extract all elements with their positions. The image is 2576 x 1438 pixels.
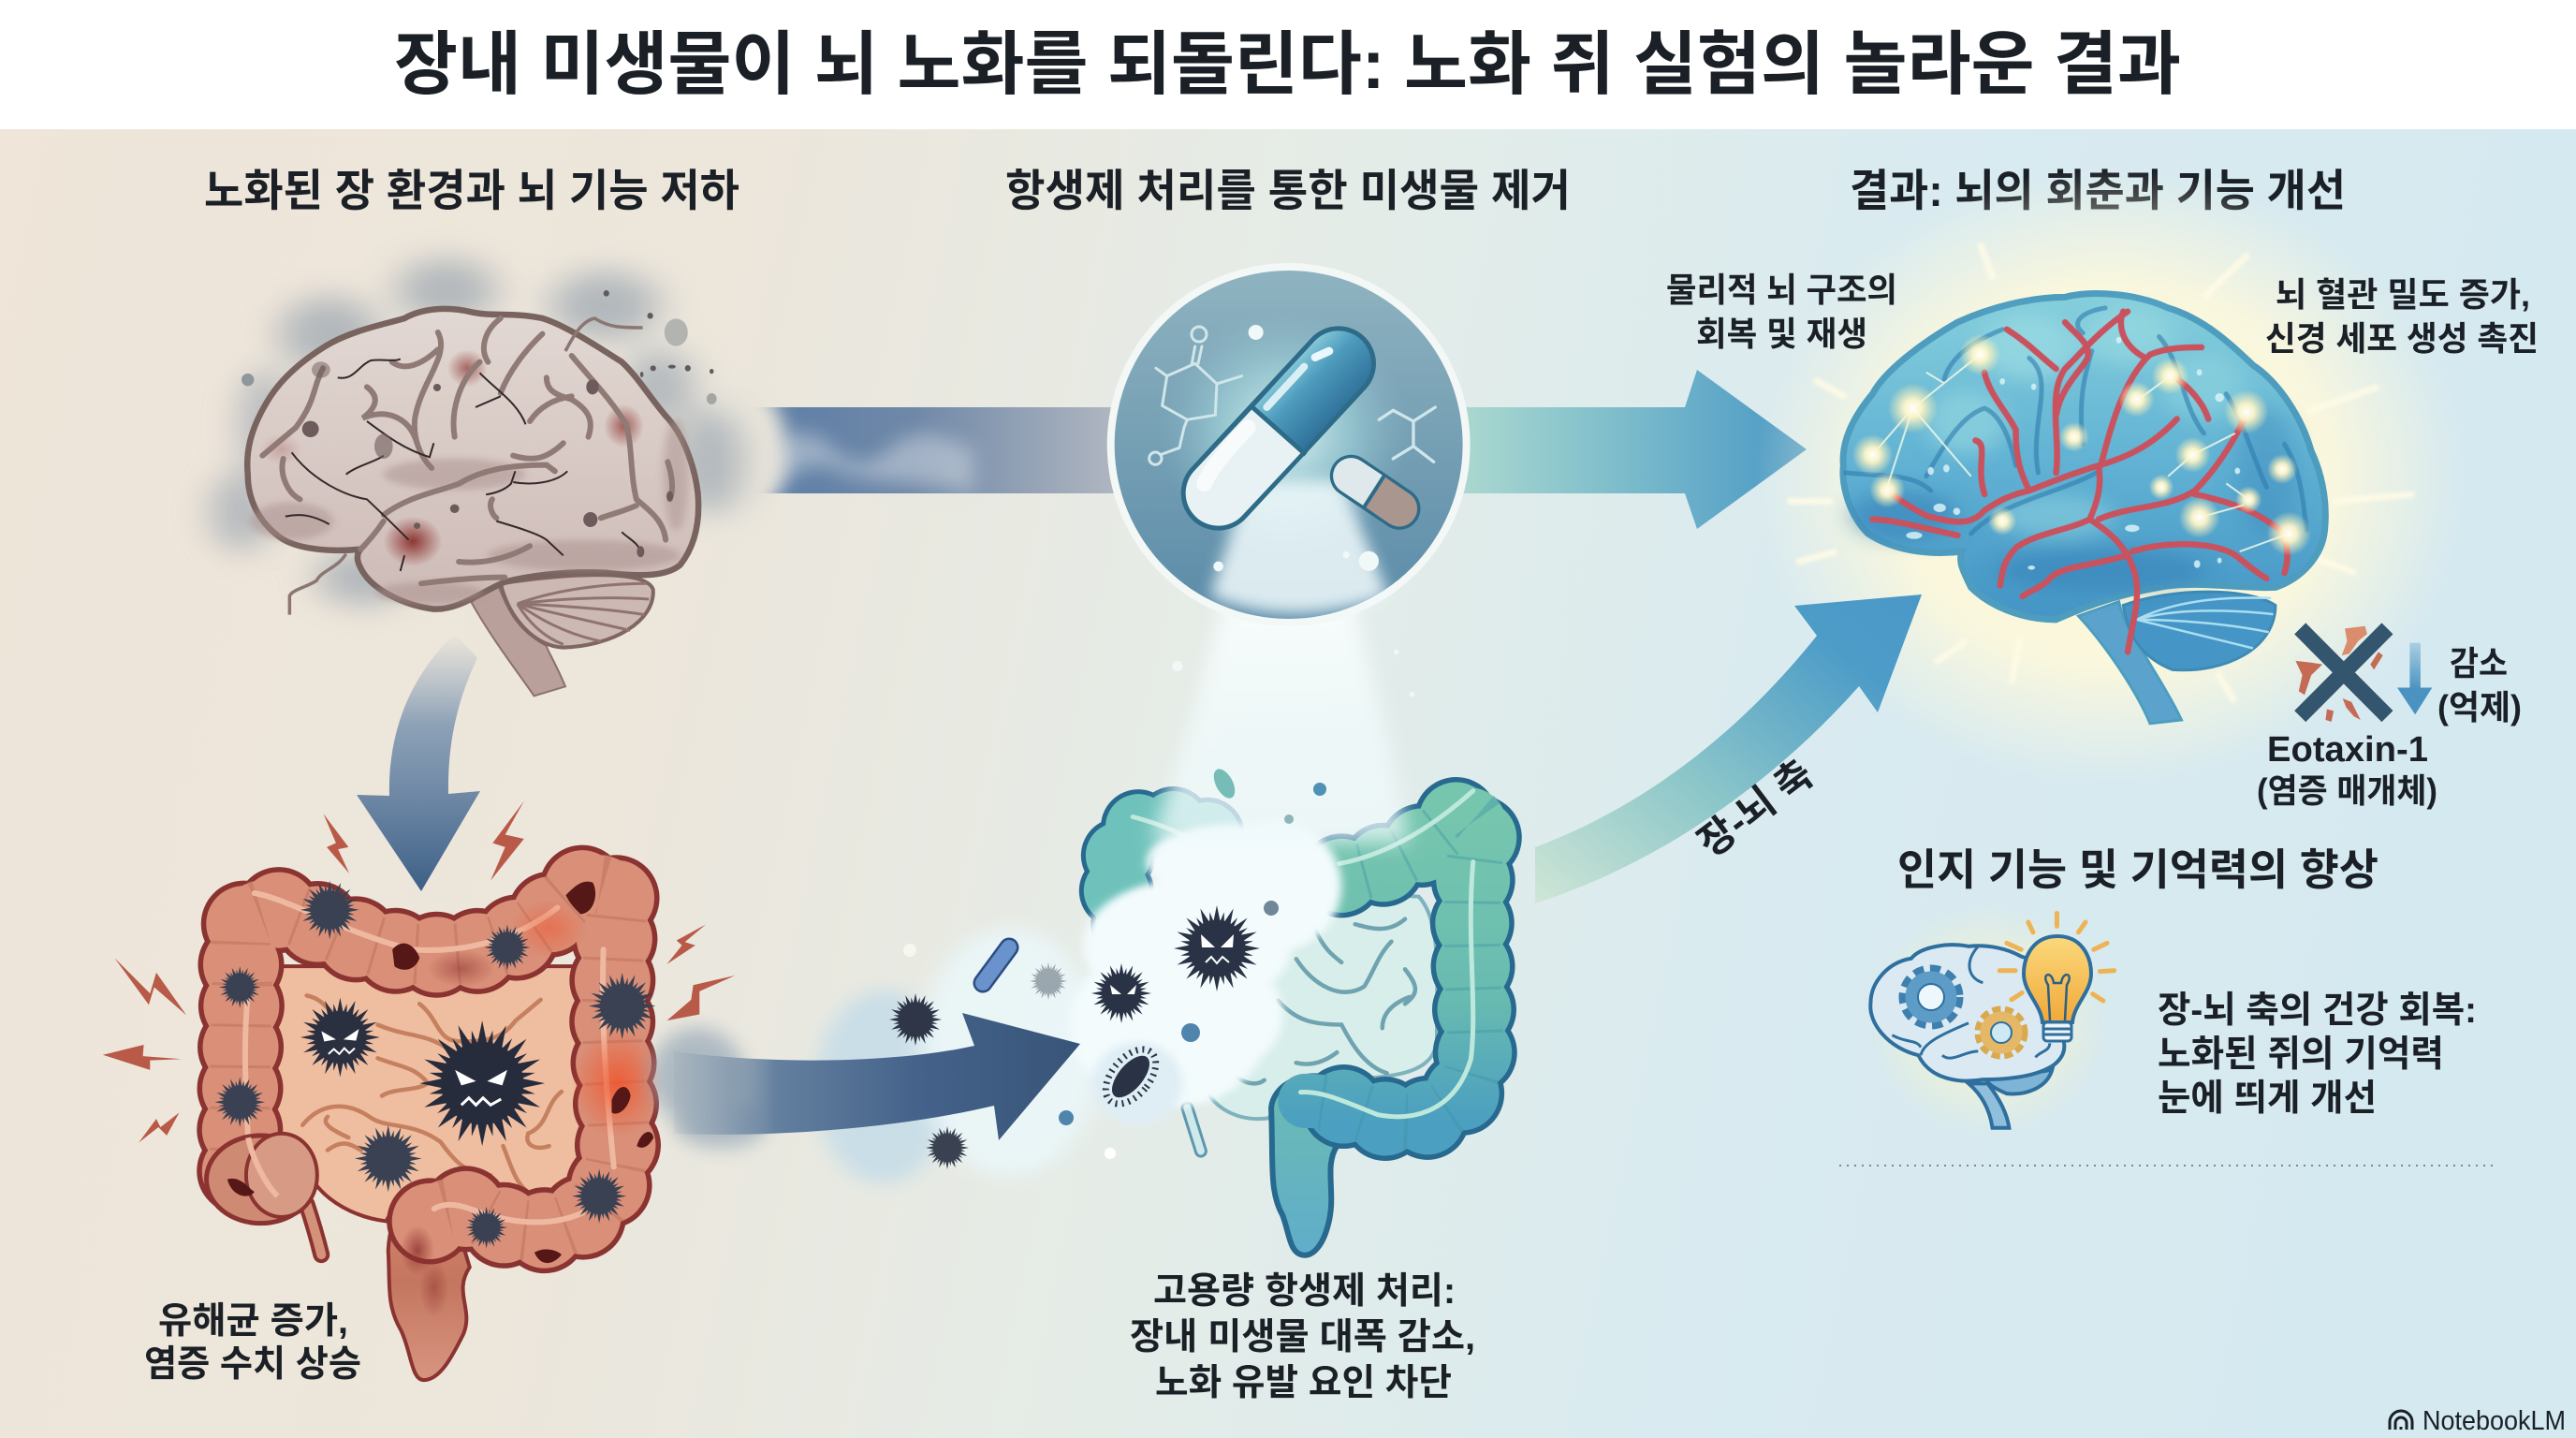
arrow: antibiotic to restored brain	[1451, 370, 1807, 529]
label: structure recovery: 물리적 뇌 구조의	[1666, 271, 1897, 309]
fold shading	[250, 418, 689, 604]
caption: aged gut: 염증 수치 상승	[144, 1344, 361, 1385]
blue gear	[1903, 969, 1959, 1025]
white clearing cloud	[1069, 820, 1341, 1125]
restored folds	[1846, 308, 2306, 534]
bulb rays	[1999, 914, 2115, 1001]
label: vessel density: 뇌 혈관 밀도 증가,	[2276, 275, 2530, 314]
caption: antibiotic treatment: 장내 미생물 대폭 감소,	[1130, 1317, 1475, 1357]
label: gut-brain axis: 장-뇌 축	[1690, 751, 1821, 865]
faded pathogen	[1030, 962, 1067, 1000]
caption: aged gut: 유해균 증가,	[158, 1301, 348, 1342]
heading: antibiotic microbe removal: 항생제 처리를 통한 미생물 제거	[1005, 166, 1571, 215]
pathogen left upper	[889, 993, 942, 1046]
blood vessels	[1872, 312, 2288, 652]
cross mark	[2300, 628, 2387, 716]
arrow: aged brain down to gut	[357, 634, 480, 891]
NotebookLM logo: NotebookLM	[2422, 1406, 2566, 1436]
halo: restored brain glow	[1755, 169, 2466, 786]
large capsule	[1205, 351, 1339, 493]
label: vessel density: 신경 세포 생성 촉진	[2265, 319, 2539, 358]
appendix	[307, 1205, 321, 1255]
blue rod inner	[983, 947, 1009, 983]
treated small intestine	[1201, 896, 1437, 1119]
rectum	[388, 1183, 470, 1380]
molecule rings	[1149, 327, 1207, 464]
brainstem	[472, 587, 565, 696]
aged gut	[103, 801, 735, 1380]
cracks	[285, 359, 640, 571]
arrow: gut-brain axis	[1535, 594, 1922, 903]
caption: antibiotic treatment	[1130, 1271, 1475, 1403]
smoke around aged brain	[212, 259, 743, 606]
disc glow	[1159, 309, 1409, 559]
lesions	[302, 361, 673, 557]
label: structure recovery: 회복 및 재생	[1696, 315, 1867, 353]
text: gut-brain axis recovery: 장-뇌 축의 건강 회복:	[2158, 990, 2477, 1031]
caption: antibiotic treatment: 고용량 항생제 처리:	[1153, 1271, 1456, 1312]
small capsule	[1351, 475, 1399, 508]
label: structure recovery	[1666, 271, 1897, 353]
large intestine tube	[240, 884, 618, 1231]
hot inflamed zones	[401, 900, 664, 1317]
sparkle dots	[1172, 325, 1414, 697]
debris particles	[242, 290, 717, 404]
dark lesions	[227, 882, 653, 1263]
cecum	[207, 1134, 317, 1224]
angry pathogen large	[418, 1020, 546, 1147]
restored cortex	[1843, 294, 2325, 620]
restored brain	[1843, 294, 2325, 724]
icon: Eotaxin-1 crossed out	[2295, 626, 2432, 722]
aged brain	[212, 259, 743, 696]
floating pathogens in cloud	[889, 766, 1326, 1169]
cell highlights	[1906, 337, 2240, 570]
restored cerebellum	[2123, 592, 2276, 670]
treated ascending colon	[1116, 823, 1233, 924]
cortical folds	[262, 318, 672, 583]
treated sigmoid and rectum	[1271, 1076, 1337, 1255]
large fleeing pathogen	[1173, 904, 1261, 992]
bolts of inflammation	[103, 801, 735, 1143]
label: decrease	[2437, 644, 2522, 726]
inflammatory fragments	[2295, 626, 2383, 722]
title: 장내 미생물이 뇌 노화를 되돌린다: 노화 쥐 실험의 놀라운 결과	[394, 25, 2181, 103]
label: decrease: (억제)	[2437, 688, 2522, 726]
gold gear	[1978, 1009, 2025, 1056]
small brain	[1870, 945, 2064, 1128]
molecule sketch right	[1379, 407, 1435, 462]
pathogens on colon	[214, 880, 656, 1249]
antibiotic beam	[1151, 524, 1409, 843]
cortex lobes shading	[1851, 308, 2298, 591]
label: Eotaxin-1: Eotaxin-1	[2267, 730, 2428, 770]
text: gut-brain axis recovery	[2158, 990, 2477, 1119]
blue rod bacterium	[983, 947, 1009, 983]
arrow: aged brain to antibiotic	[693, 381, 1123, 521]
down arrow head	[2397, 688, 2432, 714]
restored brainstem	[2078, 602, 2181, 724]
powder stream	[1210, 480, 1388, 613]
light bulb	[2024, 936, 2091, 1041]
heading: cognition improvement: 인지 기능 및 기억력의 향상	[1897, 845, 2378, 894]
caption: aged gut	[144, 1301, 361, 1385]
text: gut-brain axis recovery: 눈에 띄게 개선	[2158, 1078, 2377, 1119]
pale cloud behind arrow	[815, 928, 1101, 1184]
down arrow shaft	[2409, 643, 2421, 689]
red inflamed spots	[260, 349, 644, 566]
glowing neurons	[1852, 333, 2311, 556]
pathogen left lower	[926, 1126, 969, 1169]
cerebellum	[501, 575, 653, 648]
label: vessel density	[2265, 275, 2539, 358]
loose particles	[903, 766, 1326, 1159]
disc ring	[1107, 263, 1471, 626]
icon glow	[1867, 903, 2111, 1137]
heading: result brain rejuvenation: 결과: 뇌의 회춘과 기능 개선	[1850, 166, 2346, 215]
heading: aged gut and brain decline: 노화된 장 환경과 뇌 기능 저하	[204, 166, 739, 215]
treated gut	[815, 791, 1481, 1255]
header band	[0, 0, 2576, 129]
antibiotic capsule disc	[1107, 263, 1471, 697]
angry pathogen small	[300, 997, 380, 1078]
arrow: gut smoke to treated gut	[651, 1013, 1080, 1148]
label: Eotaxin-1: (염증 매개체)	[2257, 771, 2437, 810]
caption: antibiotic treatment: 노화 유발 요인 차단	[1155, 1363, 1452, 1403]
label: Eotaxin-1	[2257, 730, 2437, 810]
dying nerve fibres	[289, 318, 643, 615]
bacillus germ	[1096, 1040, 1165, 1113]
disc fill	[1115, 271, 1463, 619]
medium fleeing pathogen	[1091, 963, 1151, 1023]
cortex outline	[247, 309, 698, 609]
icon: brain with gears and bulb	[1867, 903, 2115, 1137]
treated appendix	[1187, 1108, 1201, 1152]
text: gut-brain axis recovery: 노화된 쥐의 기억력	[2158, 1034, 2444, 1075]
molecule sketch left	[1156, 346, 1242, 454]
label: decrease: 감소	[2450, 644, 2508, 682]
treated large intestine tube	[1133, 791, 1481, 1122]
small intestine	[269, 966, 595, 1221]
white neural filaments	[1872, 355, 2289, 551]
